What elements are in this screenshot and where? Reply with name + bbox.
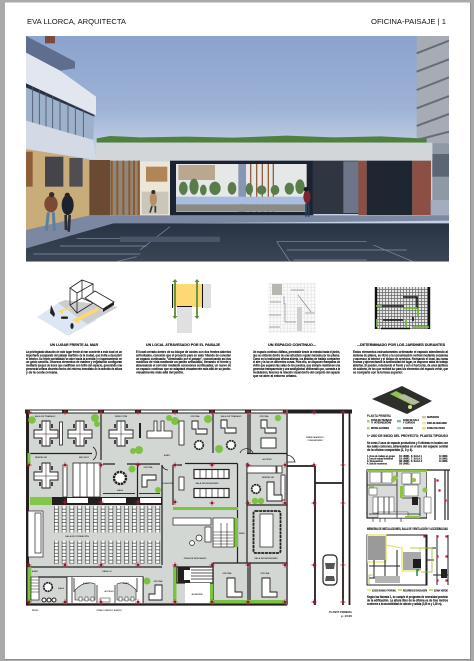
room labels: ASEO (164, 454, 170, 457)
table: usage list: 6. SALA 1 (411, 454, 422, 458)
ground floor facade (89, 160, 431, 215)
lecture desks (54, 506, 161, 564)
legend: SERVICIOS (427, 416, 439, 419)
service blocks and stairs (28, 511, 234, 603)
icon: continuous space plan (268, 283, 316, 333)
text block: column 3: Un espacio continuo diáfano, permeable desde la entrada hasta el jardín, (253, 350, 340, 354)
plan floor and shell (25, 410, 352, 605)
text block: column 2: El local cerrado dentro de su bloque de costes con dos frentes abiertos (136, 350, 231, 354)
table: usage list: 10 UNID. (399, 454, 410, 458)
room labels: PASILLO (102, 570, 112, 573)
meeting tables (194, 470, 229, 498)
conference table (254, 511, 280, 553)
table: usage list: 15 UNID. (399, 456, 410, 460)
car (323, 555, 337, 585)
text block: column 4: Estos elementos estructurantes ordenarán el espacio atendiendo al (353, 350, 448, 354)
interior walls (27, 414, 287, 603)
table: usage list: 16 UNID. (439, 456, 448, 460)
text block: use description (367, 441, 448, 452)
room labels: SALA DE REUNIONES (254, 557, 278, 560)
table: usage list: 7. SALA 2 (411, 456, 422, 460)
room labels: ALMACÉN (162, 482, 173, 485)
text block: column 4: se comparte con la terraza superior. (353, 370, 403, 374)
text block: column 2 (136, 350, 232, 374)
room labels: PATIO (32, 609, 38, 612)
table: usage list: 3. Despachos (367, 459, 383, 463)
text block: column 1 (26, 350, 123, 374)
table: usage list: 8. SALA 3 (411, 459, 422, 463)
concrete fascia (96, 143, 432, 161)
legend: ZONA DE PASO (427, 427, 445, 430)
text block: column 1: y de la costa cercana. (26, 370, 58, 374)
room labels (32, 415, 324, 612)
room labels: ASEO (83, 582, 89, 585)
room labels: DIRECCIÓN (115, 415, 128, 418)
table: usage list: 10 UNID. (439, 459, 448, 463)
table: usage list: 2. Zona de trabajo individual (367, 456, 393, 460)
text block: accessibility note (367, 595, 448, 606)
mini plan: uses (367, 470, 450, 522)
plan title and scale: p. 1/100 (341, 614, 352, 618)
room labels: ZONA DE DESCANSO (184, 557, 207, 560)
icon: crossed by landscape (172, 279, 211, 333)
icon: isometric site (37, 280, 118, 336)
section name and page number: OFICINA-PAISAJE | 1 (371, 17, 446, 26)
text block: accessibility note: Según las Normas 1, se cumple el programa de necesidad previsto (367, 595, 448, 599)
room labels: DESPACHO (262, 476, 274, 479)
plan title and scale: PLANTA PRIMERA (329, 610, 353, 614)
table: usage list: 08 UNID. (399, 459, 410, 463)
left building (26, 36, 96, 230)
room labels: OFICINA (260, 415, 269, 418)
structural columns (26, 409, 346, 605)
legend: accessibility (367, 590, 448, 592)
room labels: OFICINA (260, 572, 270, 575)
text block: column 1: mediante juegos de luces que cualifican con brillo del espacio, generando una (26, 364, 122, 368)
text block: column 2: un espacio continuado: "Atravesado por el paisaje", comunicando así dos (136, 357, 231, 361)
text block: use description: Se crean 2 usos de espacio productivos y 5 oficinas en locales con (367, 441, 448, 445)
text block: column 4: sistema de pilares, su ritmo y la comunicación vertical mediante escaleras (353, 353, 448, 357)
room labels: ASEO (123, 582, 129, 585)
right tower (417, 36, 449, 200)
text block: column 1: presencia urbana discreta dentro del entorno inmediato de la avenida de altura (26, 367, 122, 371)
desk clusters (34, 421, 285, 500)
people (44, 187, 311, 232)
text block: column 1: un gesto sencillo. Diversos elementos de madera y vegetación configuran (26, 360, 122, 364)
legend: INSTALACIONES (371, 427, 389, 430)
text block: column 4: de cubierta, de los que recibirá luz para los elementos del espacio verde, que (353, 367, 448, 371)
room labels: ASEO (32, 570, 38, 573)
mini plan: accessibility (367, 535, 448, 585)
text block: column 1: importante escaparate del paisaje marítimo de la ciudad, que invita a descubrir (26, 353, 123, 357)
green patches (28, 414, 285, 603)
text block: column 2: un espacio continuo que se adaptará visualmente más allá de su jardín. (136, 367, 231, 371)
black service band (52, 494, 162, 505)
table: usage list: 1. Zona de trabajo en grupo (367, 454, 395, 458)
legend (367, 414, 447, 430)
green roof (97, 136, 427, 143)
text block: column 2: enfrentados, conexión que el proyecto para en valor hilando de conectar (136, 353, 232, 357)
heading: un lugar frente al mar: UN LUGAR FRENTE AL MAR (50, 343, 98, 347)
axonometric view (372, 386, 432, 414)
text block: column 2: modelos de vida mediante un paseo articulado, llevando el frente y (136, 360, 231, 364)
text block: accessibility note: de la edificación. La altura libre de la oficina es de tres metros (367, 598, 448, 602)
room labels: OFICINA (144, 466, 153, 469)
room labels: SALA DE TRABAJO (221, 415, 242, 418)
room labels: SALA (117, 489, 123, 492)
text block: column 1: La privilegiada situación de este lugar frente al mar convierte a este local en un (26, 350, 122, 354)
legend: Y ATENCIÓN (371, 422, 391, 424)
floor plan (25, 409, 353, 618)
room labels: ZONA COMÚN Y ASEOS (96, 609, 122, 612)
room labels: OFICINA (190, 415, 200, 418)
legend: ZONA DE DESCANSO (427, 422, 447, 425)
table: usage list (367, 454, 448, 466)
text block: column 3: vidrio que separan las salas de los puestos, que siempre mantienen una (253, 364, 340, 368)
text block: use description: las salas comunes, atravesadas en el aire del espacio central (367, 444, 448, 448)
room labels: SALA DE TRABAJO (35, 415, 56, 418)
legend: Y CURSOS (403, 422, 415, 424)
legend: PLANTA PRIMERA (367, 414, 392, 418)
pavement and parking (26, 200, 449, 262)
table: usage list: 4. Sala de reuniones (367, 462, 387, 466)
text block: column 3: generosa transparencia y una ambigüedad deliberada que, sumada a la (253, 367, 340, 371)
text block: column 4: abiertas. Sí pueden, reduciendo el frente y con el horizonte, da unos jardines (353, 364, 448, 368)
text block: column 3: Como en la tradicional oficina abierta, los ámbitos de trabajo comparten (253, 357, 340, 361)
room labels: SALA DE FORMACIÓN (65, 535, 89, 538)
icon: courtyards plan (375, 287, 430, 329)
heading: use of the project: 1º USO DE INICIO DEL PROYECTO: PLANTA TIPO/USO (367, 434, 448, 438)
legend: accessibility: ACCESO RODADO Y PEATONAL (372, 590, 396, 592)
text block: column 3: modulación, favorece la relación visual dentro del conjunto del espacio (253, 370, 340, 374)
room labels: ALMACÉN (192, 593, 203, 596)
legend: ZONA DE SALA (403, 419, 419, 422)
heading: un local atravesado por el paisaje: UN LOCAL ATRAVESADO POR EL PAISAJE (146, 343, 221, 347)
room labels: ACCESO (262, 458, 272, 461)
heading: un espacio continuo: UN ESPACIO CONTINUO... (268, 343, 316, 347)
room labels: PASO (239, 532, 245, 535)
text block: column 3: que se abre al entorno urbano. (253, 374, 297, 378)
room labels: SALA DE REUNIONES (195, 482, 219, 485)
room labels: DESPACHO (35, 456, 47, 459)
legend: accessibility: ZONA VERDE (434, 590, 448, 592)
heading: determinado por los jardines: ...DETERMINADO POR LOS JARDINES DURANTES (357, 343, 446, 347)
text block: column 2: atravesando el corredor mediante conexiones continuadas; un nuevo de (136, 364, 231, 368)
parking walls (287, 413, 350, 605)
L desks (142, 420, 282, 600)
room labels: SALA (58, 587, 64, 590)
text block: column 3 (253, 350, 340, 378)
room labels: OFICINA (154, 580, 163, 583)
round tables (42, 441, 260, 602)
legend: ACCESOS (403, 427, 413, 430)
room labels: ARCHIVO (79, 456, 89, 459)
legend: accessibility: RECORRIDO DE EVACUACIÓN (403, 590, 427, 592)
table: usage list: 12 UNID. (439, 454, 448, 458)
room labels: ACCESO (104, 590, 114, 593)
text block: use description: de la oficina compartida (2, 3 y 4). (367, 448, 413, 452)
text block: column 3: el aire y la luz en diferentes zonas. Para ello, se disponen mamparas de (253, 360, 340, 364)
table: usage list: 03 UNID. (399, 462, 410, 466)
text block: accessibility note: conforme a la accesibilidad de cálculo y salida (2,50 m y 1,50 m). (367, 602, 442, 606)
room labels: COMUNITARIO (307, 439, 323, 442)
room labels: OFICINA (222, 572, 232, 575)
text block: column 4: y ascensor, al interior y el bloque de servicios. Revisando el local, las zonas (353, 357, 448, 361)
text block: column 1: el interior. Su frente acristalado se abre hacia la avenida y el aparcamiento en (26, 357, 122, 361)
photo: building render (26, 36, 449, 262)
door arcs (93, 447, 295, 470)
text block: column 3: que se entiende dentro de una estructura regular marcada por los pilares. (253, 353, 340, 357)
title: EVA LLORCA, ARQUITECTA (27, 17, 126, 26)
legend: ZONA DE TRABAJO (371, 419, 392, 422)
text block: column 4 (353, 350, 448, 374)
room labels: APARCAMIENTO (306, 436, 324, 439)
text block: column 2: visualmente más allá del jardín. (136, 370, 184, 374)
plan title and scale (329, 610, 353, 618)
